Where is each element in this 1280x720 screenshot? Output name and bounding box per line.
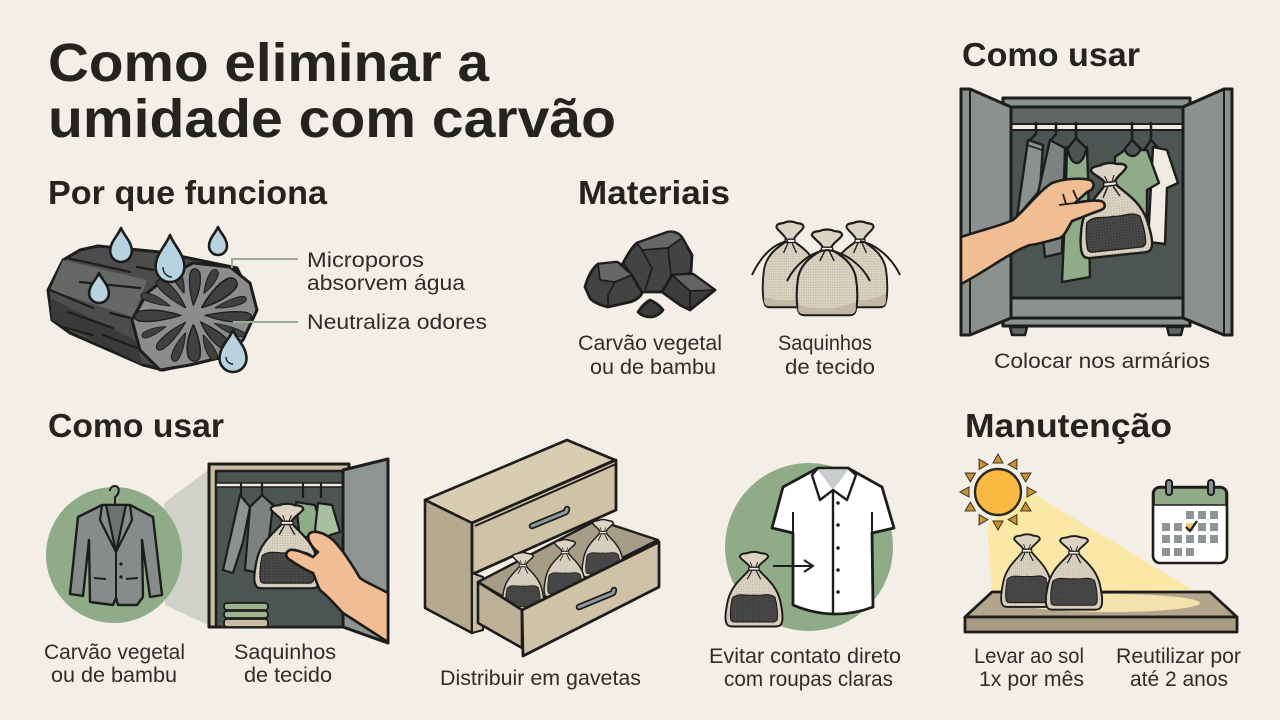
icon: charcoal log with water drops: [48, 227, 257, 372]
heading: como usar: Como usar: [48, 407, 224, 444]
label: saquinhos de tecido: de tecido: [244, 664, 332, 687]
label: saquinhos de tecido: [778, 332, 875, 379]
label: reutilizar: até 2 anos: [1130, 668, 1228, 691]
panel: como usar (bottom): [44, 407, 901, 691]
icon: charcoal pieces: [585, 232, 715, 317]
panel: manutenção: [960, 407, 1241, 691]
icon: open drawers with bags: [425, 440, 659, 656]
heading: manutenção: Manutenção: [965, 407, 1172, 444]
label: levar ao sol: Levar ao sol: [974, 645, 1084, 668]
label: saquinhos de tecido: [234, 641, 336, 687]
icon: shelf with bags: [965, 534, 1237, 632]
panel: materiais: [578, 174, 900, 379]
callout: microporos: Microporos: [307, 249, 424, 272]
heading: como usar: Como usar: [962, 36, 1140, 73]
label: levar ao sol: 1x por mês: [979, 668, 1084, 691]
label: saquinhos de tecido: Saquinhos: [778, 332, 872, 355]
label: saquinhos de tecido: de tecido: [785, 356, 875, 379]
sunbeam: [987, 492, 1193, 592]
icon: calendar: [1153, 480, 1227, 563]
callout: microporos: absorvem água: [307, 272, 465, 295]
label: carvão vegetal: Carvão vegetal: [44, 641, 185, 664]
label: evitar contato: Evitar contato direto: [709, 645, 901, 668]
title: Como eliminar a: [48, 33, 490, 93]
callout: microporos: [307, 249, 465, 295]
label: colocar nos armários: Colocar nos armários: [994, 350, 1210, 373]
icon: jacket in green circle: [46, 486, 182, 623]
callout: neutraliza odores: Neutraliza odores: [307, 311, 487, 334]
label: saquinhos de tecido: Saquinhos: [234, 641, 336, 664]
label: carvão vegetal: [578, 332, 722, 379]
label: carvão vegetal: ou de bambu: [51, 664, 177, 687]
label: carvão vegetal: ou de bambu: [590, 356, 716, 379]
icon: shirt with bag and arrow: [725, 463, 894, 631]
label: distribuir em gavetas: Distribuir em gavetas: [440, 667, 641, 690]
icon: sun: [960, 454, 1036, 530]
label: evitar contato: com roupas claras: [724, 668, 893, 691]
label: reutilizar: Reutilizar por: [1116, 645, 1241, 668]
label: evitar contato: [709, 645, 901, 691]
icon: open wardrobe with hand and bag: [961, 89, 1232, 335]
leader lines: [232, 259, 298, 322]
label: carvão vegetal: Carvão vegetal: [578, 332, 722, 355]
title: [48, 33, 616, 149]
icon: fabric bags: [752, 222, 900, 315]
label: levar ao sol: [974, 645, 1084, 691]
zoom cone: [164, 470, 208, 625]
title: umidade com carvão: [48, 89, 616, 149]
icon: wardrobe with hand and bag: [209, 459, 388, 643]
panel: como usar (top right): [961, 36, 1232, 373]
panel: por que funciona: [48, 174, 487, 372]
label: reutilizar: [1116, 645, 1241, 691]
heading: materiais: Materiais: [578, 174, 730, 211]
label: carvão vegetal: [44, 641, 185, 687]
heading: por que funciona: Por que funciona: [48, 174, 328, 211]
